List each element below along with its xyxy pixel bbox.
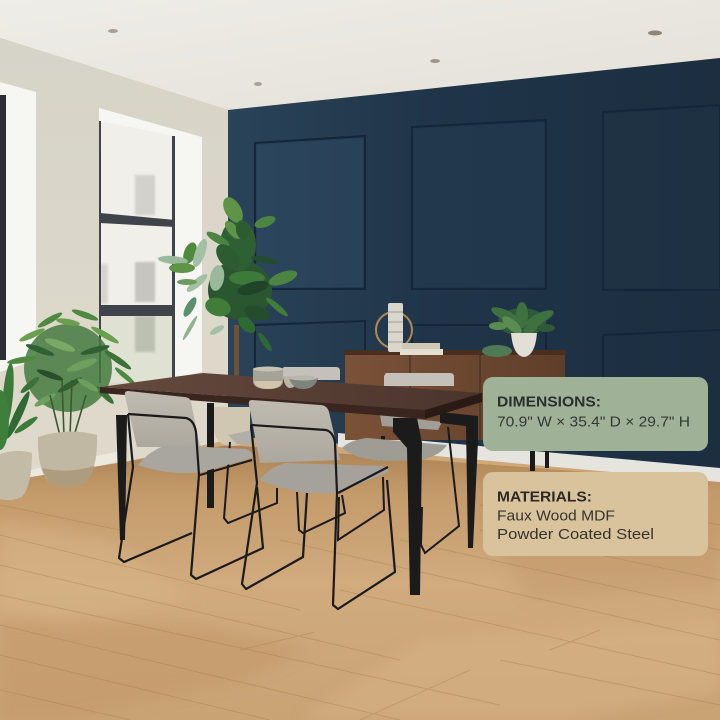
front-centre chair [242, 400, 395, 609]
table top [100, 373, 482, 410]
small palm in pot at far left [0, 363, 39, 500]
card: materials [483, 472, 708, 556]
left window [0, 82, 36, 372]
left wall with windows [0, 38, 228, 482]
baseboard [338, 433, 720, 482]
dimensions value: 70.9" W × 35.4" D × 29.7" H [497, 414, 690, 430]
dining table [100, 373, 482, 595]
back-right chair [338, 373, 459, 553]
table legs [116, 403, 478, 595]
fiddle leaf fig plant [158, 194, 299, 446]
decor: ring and vase [376, 303, 412, 352]
sideboard [344, 350, 566, 471]
heading: dimensions: DIMENSIONS: [497, 394, 601, 410]
front-left chair [119, 391, 263, 579]
material: faux wood: Faux Wood MDF [497, 508, 615, 524]
heading: materials: MATERIALS: [497, 490, 592, 506]
centre window [99, 108, 202, 384]
navy panelled wall [228, 58, 720, 470]
ceiling [0, 0, 720, 110]
decor: small plant in white pot [482, 302, 556, 357]
back-left chair [224, 367, 345, 533]
large bamboo palm in pot [7, 307, 137, 487]
decor: books [400, 343, 443, 355]
tableware bowls [253, 366, 318, 389]
card: dimensions [483, 377, 708, 451]
floor [0, 445, 720, 720]
material: steel: Powder Coated Steel [497, 527, 654, 543]
